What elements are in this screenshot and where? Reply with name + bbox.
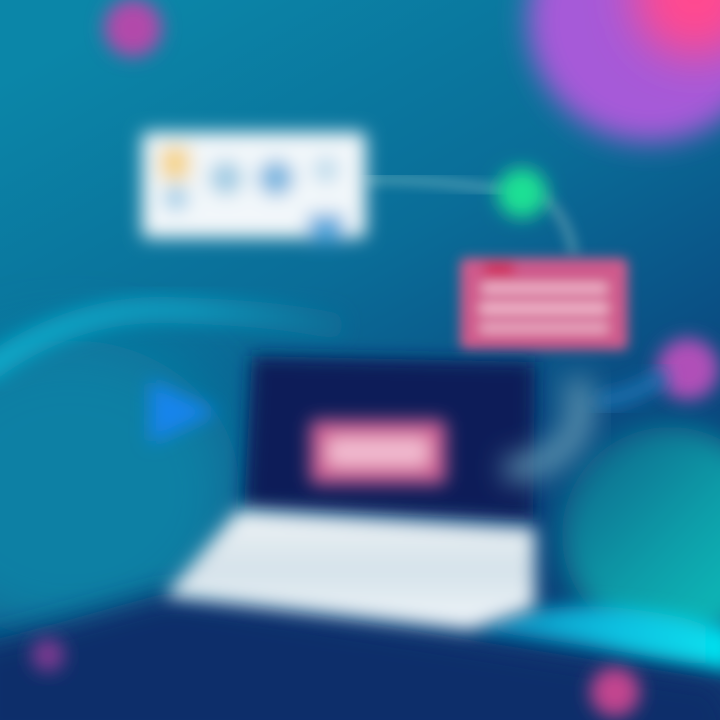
- arrow: curved from pink card to laptop: [505, 380, 581, 470]
- panel: white dashboard card: [142, 132, 366, 242]
- icon: red mark: [484, 262, 514, 276]
- icon: green node: [497, 168, 547, 218]
- panel: pink text card: [460, 258, 628, 350]
- dark navy floor: [0, 592, 720, 720]
- icon: blue dot centre: [209, 161, 243, 195]
- icon: blue dot right: [258, 160, 294, 196]
- icon: blue tile left: [163, 185, 189, 211]
- left teal glow: [0, 340, 240, 640]
- text lines: pink card: [482, 284, 607, 293]
- decorative circle: top left pink: [104, 0, 162, 57]
- connector line: card to node: [365, 180, 505, 190]
- laptop base: [165, 510, 535, 630]
- cyan wave: bottom right: [475, 606, 720, 672]
- decorative circle: bottom right teal: [562, 427, 720, 643]
- decorative circle: bottom left pink: [31, 638, 65, 672]
- decorative circle: right purple: [657, 338, 719, 400]
- icon: yellow tile: [160, 146, 190, 180]
- laptop: [165, 356, 535, 630]
- screen button: [310, 420, 446, 484]
- icon: pale dot far right: [313, 157, 339, 183]
- connector: laptop to right circle glow: [595, 375, 665, 402]
- decorative circle: bottom right pink: [590, 667, 640, 717]
- connector curve: node to pink card: [540, 195, 574, 255]
- decorative glow: top right pink core: [633, 0, 720, 57]
- laptop screen: [244, 356, 535, 520]
- cyan wave: left: [0, 310, 330, 368]
- button text lines: [328, 438, 428, 466]
- icon: blue play triangle: [150, 380, 218, 444]
- decorative circle: top right purple: [528, 0, 720, 142]
- icon: blue badge: [308, 214, 344, 242]
